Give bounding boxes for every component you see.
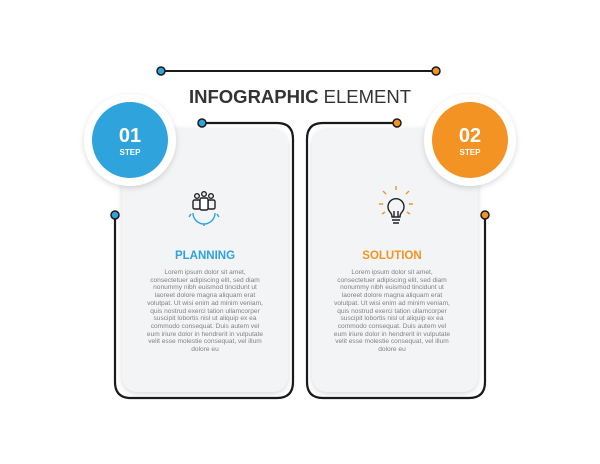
heading: solution: SOLUTION xyxy=(362,250,422,262)
step badge 02: 02 xyxy=(459,125,481,147)
heading: planning: PLANNING xyxy=(175,250,235,262)
icon: team with gear xyxy=(189,192,219,226)
step badge 01 xyxy=(84,94,176,186)
icon: light bulb xyxy=(379,186,413,223)
title: INFOGRAPHIC ELEMENT xyxy=(189,86,411,107)
step badge 01: 01 xyxy=(119,125,141,147)
step badge 01: STEP xyxy=(120,148,141,157)
step badge 02: STEP xyxy=(460,148,481,157)
top connector line xyxy=(157,67,440,75)
step badge 02 xyxy=(424,94,516,186)
text block: planning: Lorem ipsum dolor sit amet, consectetuer adipiscing elit, sed diam nonummy nibh euismod tincidunt ut laoreet dolore magna aliquam erat volutpat. Ut wisi enim ad minim veniam, quis nostrud exerci tation ullamcorper suscipit lobortis nisl ut aliquip ex ea commodo consequat. Duis autem vel eum iriure dolor in hendrerit in vulputate velit esse molestie consequat, vel illum dolore eu xyxy=(147,269,263,353)
panel: left card xyxy=(111,119,293,398)
text block: solution: Lorem ipsum dolor sit amet, consectetuer adipiscing elit, sed diam nonummy nibh euismod tincidunt ut laoreet dolore magna aliquam erat volutpat. Ut wisi enim ad minim veniam, quis nostrud exerci tation ullamcorper suscipit lobortis nisl ut aliquip ex ea commodo consequat. Duis autem vel eum iriure dolor in hendrerit in vulputate velit esse molestie consequat, vel illum dolore eu xyxy=(334,269,450,353)
panel: right card xyxy=(307,119,489,398)
